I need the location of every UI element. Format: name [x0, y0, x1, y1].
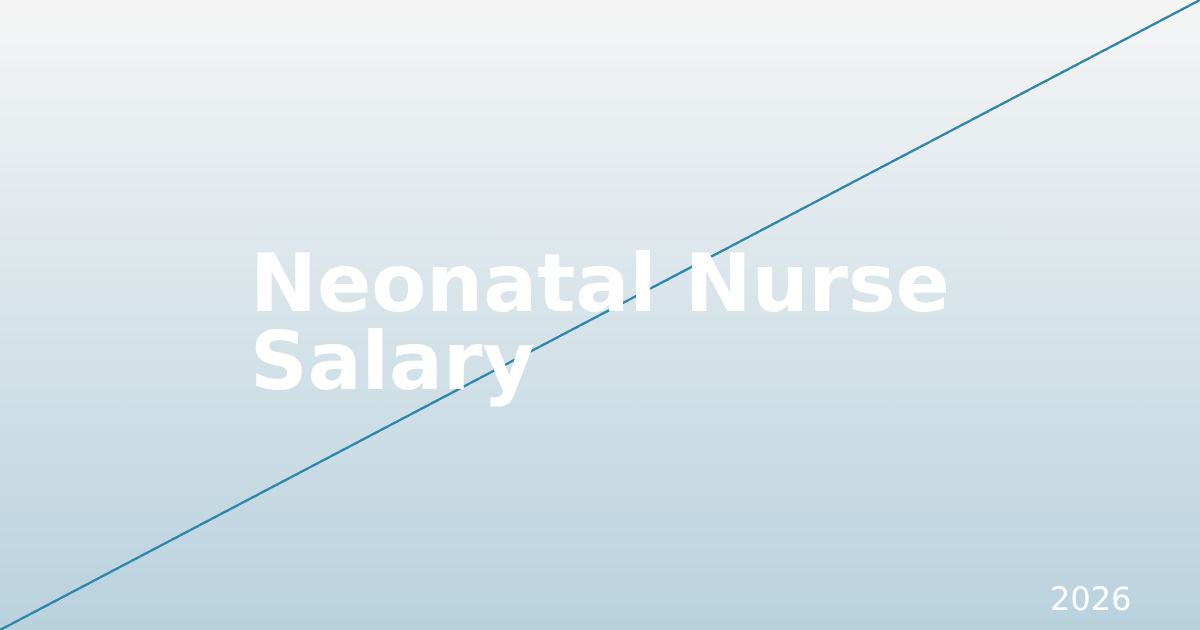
year label: 2026 [1050, 580, 1131, 618]
title: Salary [250, 315, 535, 408]
title: Neonatal Nurse [250, 237, 950, 330]
